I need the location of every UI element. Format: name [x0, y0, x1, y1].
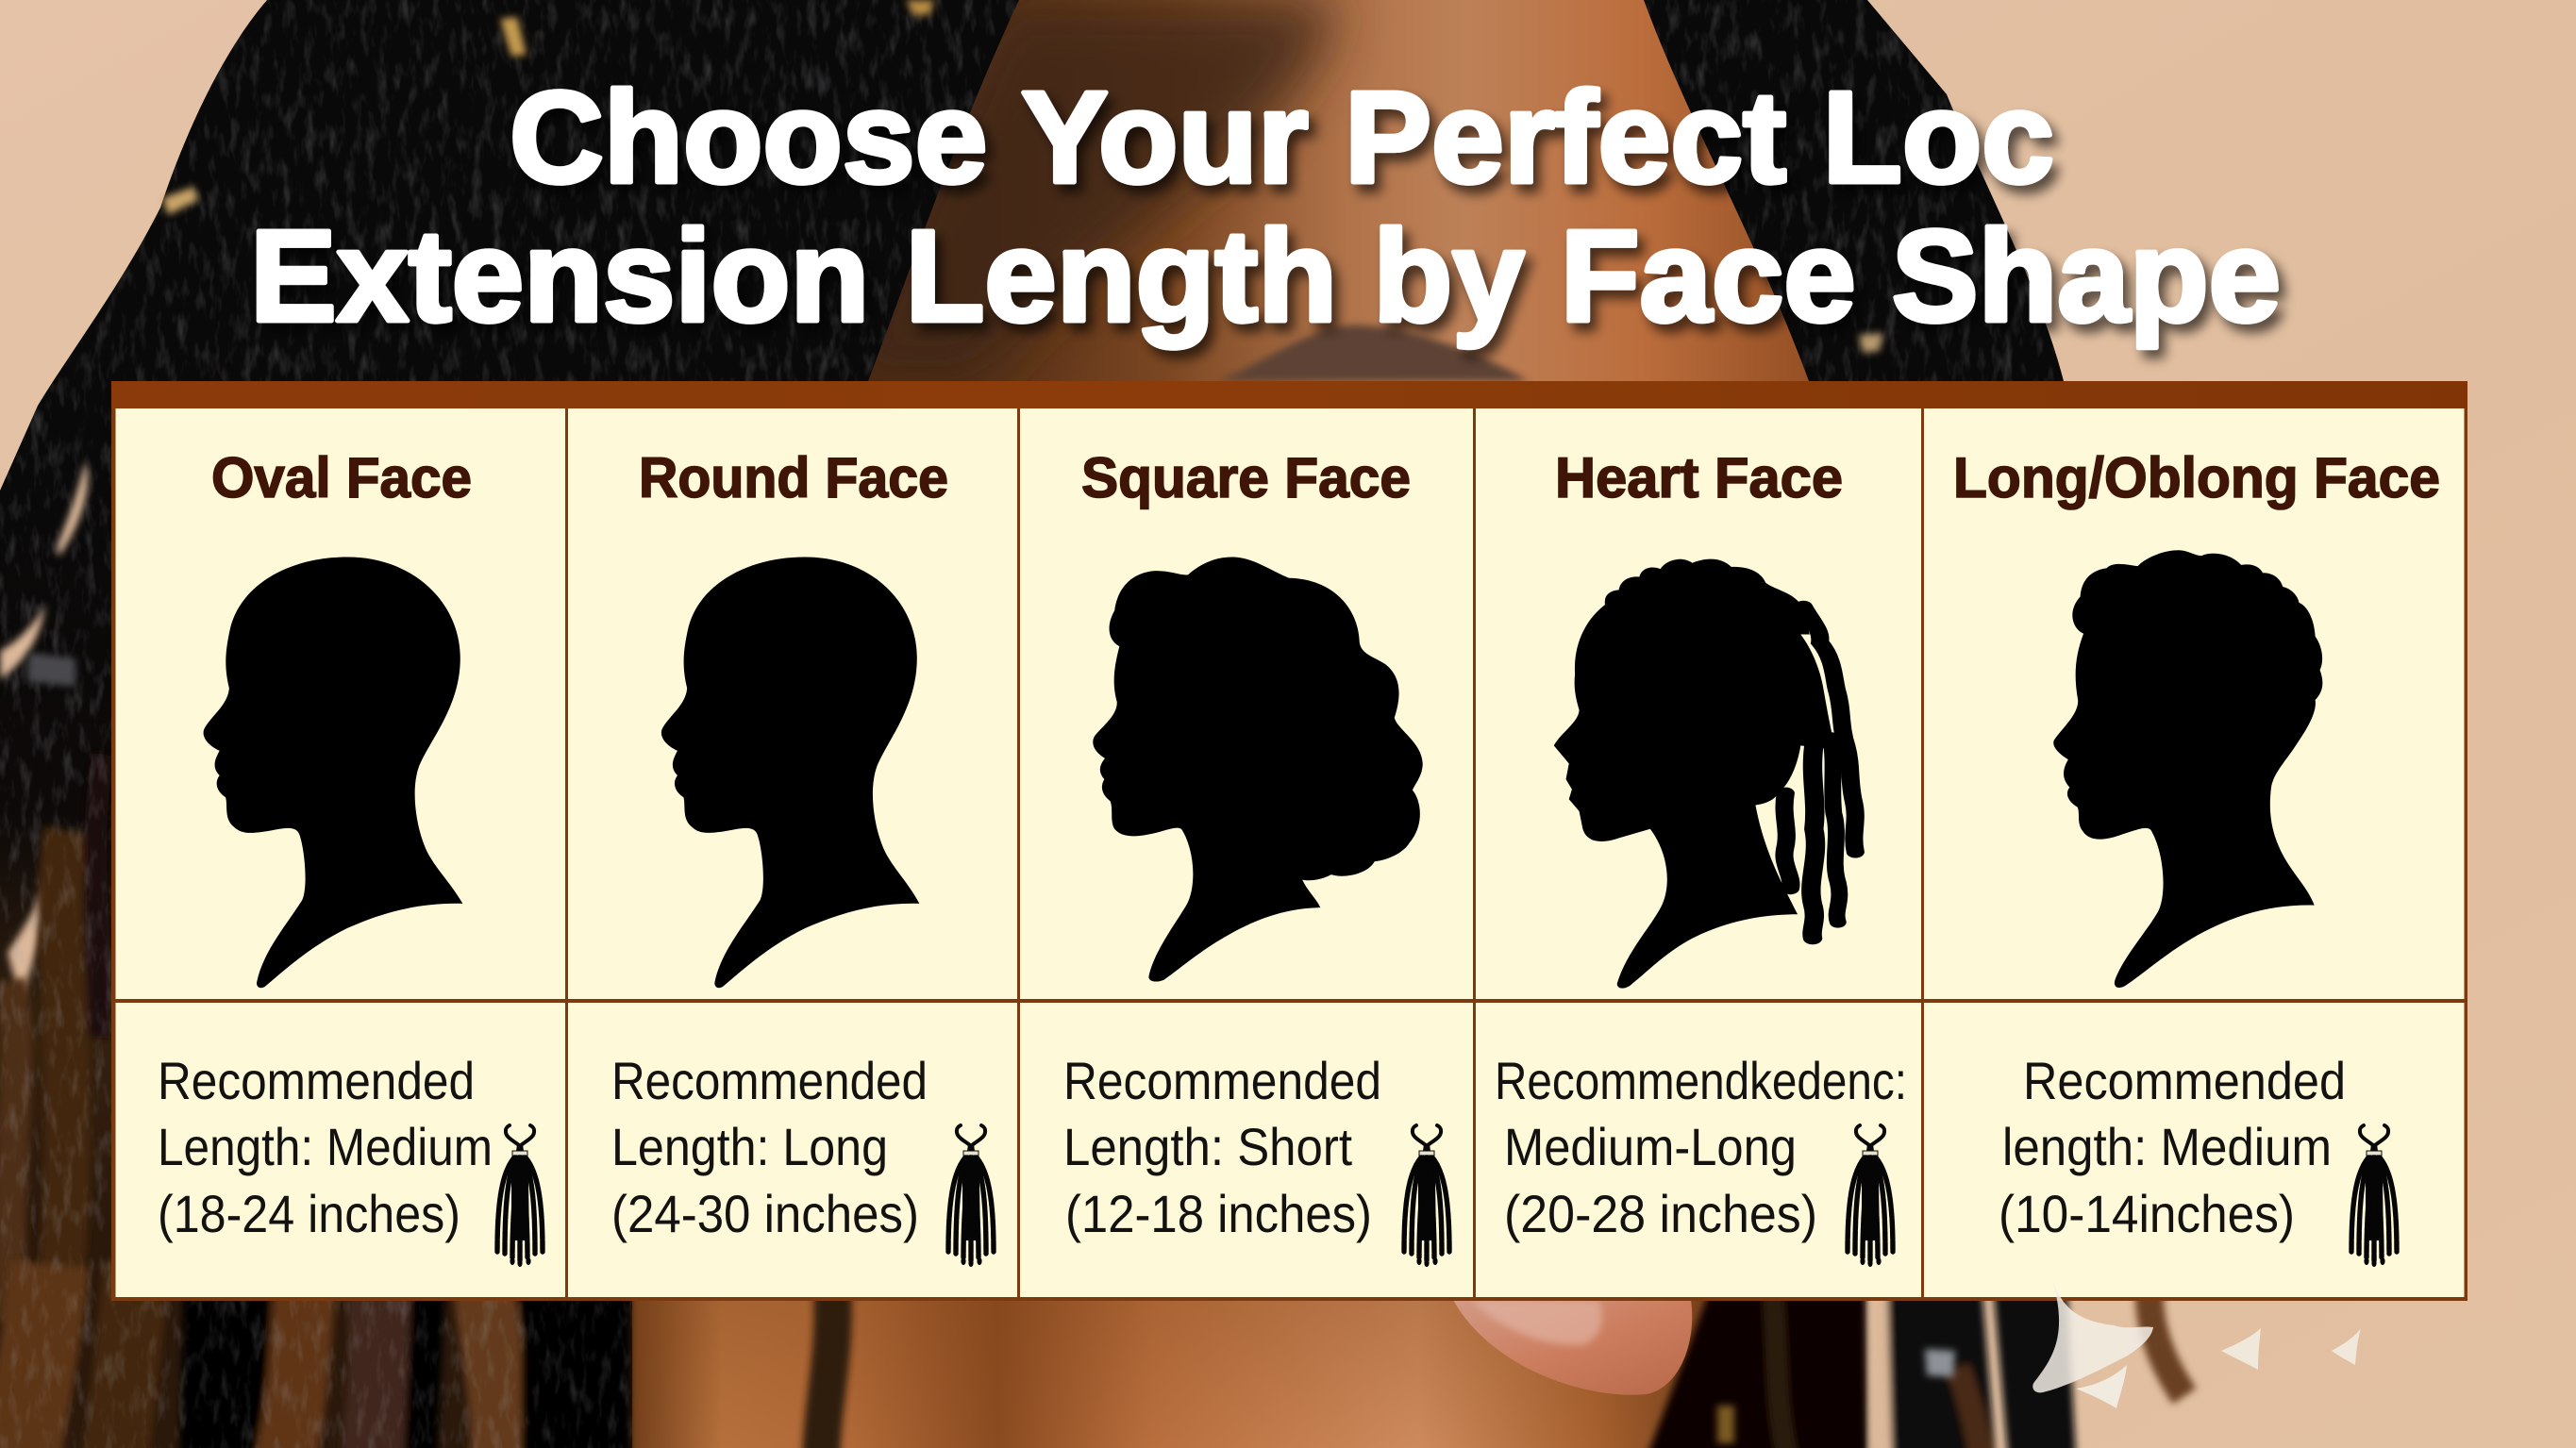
locs — [1784, 607, 1855, 939]
left hair mass — [0, 0, 1019, 1448]
silhouette: heart face with locs — [1554, 559, 1855, 989]
title: Extension Length by Face Shape — [250, 204, 2281, 349]
heading: square face: Square Face — [1081, 446, 1411, 509]
gold and silver beads — [28, 0, 1955, 1443]
recommendation: heart face: Medium-Long — [1504, 1117, 1797, 1176]
silhouette: long/oblong face — [2053, 550, 2322, 988]
recommendation: oval face: (18-24 inches) — [158, 1184, 460, 1243]
eyebrow — [1217, 325, 1529, 381]
heading: long/oblong face: Long/Oblong Face — [1953, 446, 2440, 509]
lip highlight — [1472, 1300, 1602, 1345]
icon: loc bundle — [1404, 1125, 1449, 1267]
recommendation: round face: Recommended — [611, 1051, 928, 1110]
column: round face — [611, 446, 994, 1267]
icon: loc bundle — [948, 1125, 994, 1267]
sparkle shapes — [2032, 1279, 2361, 1408]
recommendation: round face — [611, 1051, 928, 1243]
column: long/oblong face — [1953, 446, 2440, 1267]
column: oval face — [158, 446, 543, 1267]
heading: heart face: Heart Face — [1555, 446, 1843, 509]
recommendation: long/oblong face: Recommended — [2023, 1051, 2346, 1110]
recommendation: round face: (24-30 inches) — [611, 1184, 919, 1243]
recommendation: long/oblong face — [1999, 1051, 2346, 1243]
silhouette: square face — [1093, 557, 1423, 982]
heading: round face: Round Face — [639, 446, 948, 509]
lower face skin — [623, 1292, 1727, 1448]
recommendation: square face: Recommended — [1063, 1051, 1381, 1110]
recommendation: round face: Length: Long — [611, 1117, 888, 1176]
bottom-left locs — [19, 1264, 833, 1448]
icon: loc bundle — [497, 1125, 543, 1267]
recommendation: square face — [1063, 1051, 1381, 1243]
column: square face — [1063, 446, 1449, 1267]
lips — [1453, 1300, 1692, 1395]
recommendation: long/oblong face: length: Medium — [2002, 1117, 2332, 1176]
heading: oval face: Oval Face — [211, 446, 472, 509]
header band — [111, 381, 2467, 408]
right locs — [1647, 1283, 2184, 1448]
recommendation: oval face: Length: Medium — [158, 1117, 493, 1176]
left side locs — [9, 755, 104, 1321]
forehead skin — [802, 0, 1840, 396]
column: heart face — [1495, 446, 1907, 1267]
icon: loc bundle — [2351, 1125, 2397, 1267]
recommendation: oval face — [158, 1051, 493, 1243]
right hair mass — [1644, 0, 2064, 381]
title: Choose Your Perfect Loc — [510, 65, 2054, 210]
icon: loc bundle — [1848, 1125, 1893, 1267]
title — [250, 65, 2281, 349]
silhouette: oval face — [204, 557, 462, 988]
silhouette: round face — [661, 557, 919, 988]
recommendation: square face: Length: Short — [1063, 1117, 1352, 1176]
recommendation: long/oblong face: (10-14inches) — [1999, 1184, 2295, 1243]
recommendation: heart face: (20-28 inches) — [1504, 1184, 1817, 1243]
hairline shadow — [830, 0, 1340, 381]
recommendation: heart face — [1495, 1051, 1907, 1243]
recommendation: square face: (12-18 inches) — [1065, 1184, 1372, 1243]
panel: face shape table — [111, 381, 2467, 1301]
recommendation: heart face: Recommendkedenc: — [1495, 1051, 1907, 1110]
left gaps between locs — [0, 462, 88, 1000]
recommendation: oval face: Recommended — [158, 1051, 475, 1110]
